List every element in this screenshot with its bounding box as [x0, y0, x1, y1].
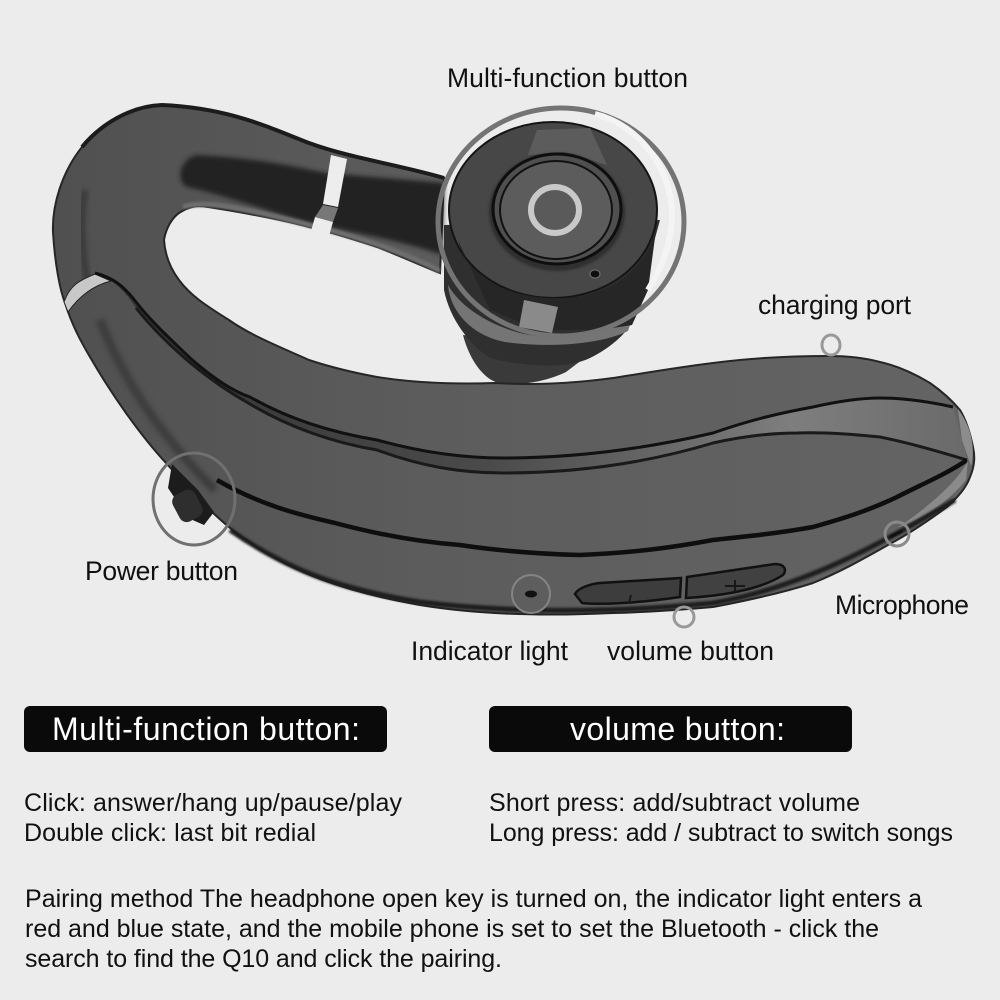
text: multi-function instructions [24, 789, 402, 847]
text: pairing method: search to find the Q10 and click the pairing. [25, 945, 502, 973]
multi-function button [489, 153, 625, 271]
hook stem dark core [180, 155, 444, 255]
label: microphone: Microphone [835, 590, 969, 620]
label: multi-function button: Multi-function button [447, 63, 688, 93]
text: pairing method: red and blue state, and the mobile phone is set to set the Bluetooth - click the [25, 915, 879, 943]
text: pairing method [25, 885, 922, 973]
charging port ring [822, 335, 840, 355]
silver hook bands [64, 155, 347, 312]
annotation ring: multi-function button [438, 108, 684, 336]
heading: volume button [489, 706, 852, 752]
text: volume instructions: Short press: add/subtract volume [489, 789, 860, 817]
text: volume instructions [489, 789, 953, 847]
callout labels [85, 63, 969, 666]
label: volume button: volume button [607, 636, 774, 666]
headset body [53, 105, 974, 614]
text: volume instructions: Long press: add / subtract to switch songs [489, 819, 953, 847]
heading: multi-function button [24, 706, 387, 752]
label: power button: Power button [85, 556, 238, 586]
label: indicator light: Indicator light [411, 636, 569, 666]
heading: multi-function button: Multi-function button: [52, 711, 360, 747]
heading: volume button: volume button: [570, 711, 785, 747]
earbud nose [463, 335, 595, 384]
text: multi-function instructions: Double click: last bit redial [24, 819, 316, 847]
microphone ring [885, 522, 909, 546]
earbud [444, 122, 660, 366]
body grooves [95, 273, 973, 610]
text: pairing method: Pairing method The headphone open key is turned on, the indicator light enters a [25, 885, 922, 913]
text: multi-function instructions: Click: answer/hang up/pause/play [24, 789, 402, 817]
indicator light [512, 575, 550, 613]
volume button ring [674, 607, 694, 627]
power button [153, 453, 235, 545]
volume buttons [575, 564, 785, 604]
headset illustration [53, 105, 974, 627]
label: charging port: charging port [758, 290, 912, 320]
